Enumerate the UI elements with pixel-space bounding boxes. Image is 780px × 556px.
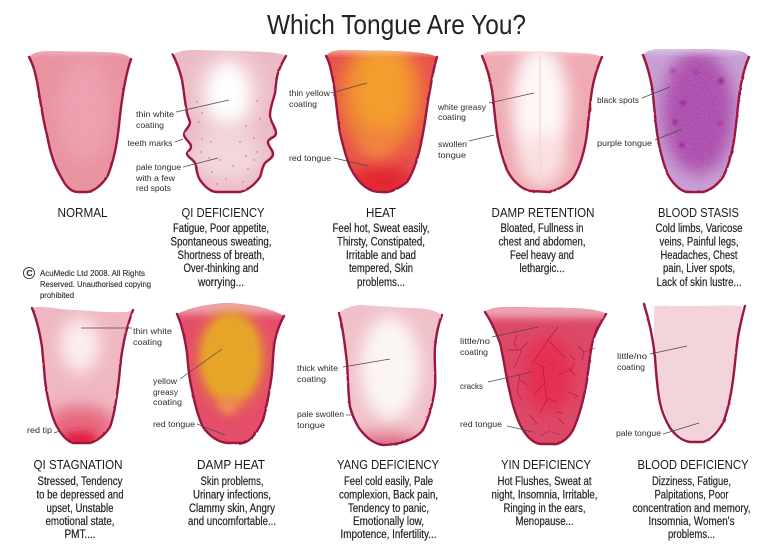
tongue: blood deficiency [642,302,746,444]
annotation: pale swollen tongue: pale swollen [297,409,344,419]
cracks [507,327,595,436]
label: damp retention: lethargic... [520,263,564,275]
label: qi stagnation [34,457,124,541]
label: heat: Feel hot, Sweat easily, [332,223,430,235]
tongue: qi stagnation [30,306,134,444]
tongue: qi deficiency [171,50,288,194]
copyright notice: C [26,268,33,278]
label: damp heat: Skin problems, [200,476,264,488]
annotation: red tongue [460,419,533,432]
label: damp heat: and uncomfortable... [188,516,276,528]
label: damp retention: DAMP RETENTION [492,205,594,220]
label: heat: Irritable and bad [346,250,416,262]
label: yang deficiency [337,457,439,541]
label: damp retention [492,205,594,275]
annotation: white greasy coating [437,93,534,122]
label: qi stagnation: Stressed, Tendency [38,476,123,488]
label: qi deficiency: Fatigue, Poor appetite, [173,223,269,235]
label: blood stasis [656,205,742,289]
annotation: black spots: black spots [597,95,639,105]
label: qi deficiency: Shortness of breath, [178,250,264,262]
label: yang deficiency: Impotence, Infertility... [340,529,436,541]
copyright notice: prohibited [40,290,74,300]
tongue: blood stasis [642,49,750,194]
label: damp retention: chest and abdomen, [498,236,586,248]
annotation: pale tongue with a few red spots: red spots [136,183,171,193]
annotation: little/no coating: little/no [617,351,647,361]
label: qi deficiency: worrying... [197,277,244,289]
annotation: little/no coating [617,346,687,372]
label: qi stagnation: to be depressed and [36,490,124,502]
title: Which Tongue Are You? [267,9,526,40]
label: qi stagnation: upset, Unstable [46,503,114,515]
annotation: pale tongue [616,423,699,438]
tongue: yang deficiency [338,305,444,446]
annotation: white greasy coating: coating [438,112,466,122]
label: heat: problems... [357,277,405,289]
annotation: yellow greasy coating: coating [153,397,182,407]
label: blood stasis: BLOOD STASIS [658,205,739,220]
tongue: heat [324,50,438,194]
label: normal: NORMAL [58,205,108,220]
label: qi deficiency [170,205,272,289]
label: qi stagnation: PMT.... [64,529,96,541]
label: yin deficiency: Menopause... [516,516,574,528]
label: damp heat [188,457,276,528]
annotation: red tongue: red tongue [153,419,195,429]
label: blood stasis: pain, Liver spots, [663,263,735,275]
annotation: white greasy coating: white greasy [437,102,487,112]
copyright notice [23,267,151,300]
label: heat: tempered, Skin [349,263,413,275]
annotation: black spots [597,87,670,105]
label: damp retention: Bloated, Fullness in [500,223,584,235]
label: qi deficiency: Over-thinking and [184,263,258,275]
label: blood deficiency: Dizziness, Fatigue, [652,476,731,488]
annotation: thin white coating: coating [133,337,162,347]
label: blood deficiency: problems... [668,529,715,541]
annotation: thin yellow coating: thin yellow [289,88,331,98]
tongue: yin deficiency [484,307,608,446]
annotation: swollen tongue [438,135,494,160]
annotation: pale tongue with a few red spots [135,158,218,193]
copyright notice: AcuMedic Ltd 2008. All Rights [40,268,145,278]
label: heat [332,205,430,289]
label: yang deficiency: Tendency to panic, [348,503,429,515]
annotation: pale tongue with a few red spots: pale tongue [136,162,181,172]
annotation: thick white coating: thick white [297,363,338,373]
annotation: little/no coating: coating [617,362,645,372]
annotation: thin white coating: thin white [133,326,172,336]
tongue: normal [28,51,132,194]
annotation: cracks: cracks [460,381,483,391]
label: qi stagnation: QI STAGNATION [34,457,122,472]
label: yin deficiency: Ringing in the ears, [504,503,586,515]
label: blood deficiency: concentration and memory, [632,503,750,515]
annotation: thin white coating [81,326,172,347]
annotation: thin white coating: thin white [136,109,174,119]
label: blood stasis: Headaches, Chest [660,250,738,262]
tongue: damp heat [176,303,286,445]
red spots [196,100,261,185]
annotation: thick white coating [297,359,390,384]
label: yin deficiency [492,457,598,528]
label: blood deficiency: BLOOD DEFICIENCY [638,457,749,472]
label: blood stasis: veins, Painful legs, [660,236,738,248]
annotation: little/no coating: little/no [460,336,490,346]
annotation: yellow greasy coating [153,349,222,407]
label: yin deficiency: Hot Flushes, Sweat at [498,476,592,488]
annotation: red tongue: red tongue [460,419,502,429]
label: qi stagnation: emotional state, [46,516,114,528]
black spots [670,68,724,148]
annotation: purple tongue [597,129,682,148]
annotation: thin yellow coating: coating [289,99,317,109]
annotation: cracks [460,372,532,391]
annotation: red tongue [289,153,368,166]
label: blood stasis: Lack of skin lustre... [656,277,742,289]
annotation: pale swollen tongue: tongue [297,420,325,430]
label: blood stasis: Cold limbs, Varicose [656,223,742,235]
annotation: red tongue [153,419,225,435]
label: heat: Thirsty, Constipated, [337,236,425,248]
annotation: little/no coating: coating [460,347,488,357]
annotation: pale swollen tongue [297,409,354,430]
copyright notice: Reserved. Unauthorised copying [40,279,151,289]
annotation: pale tongue with a few red spots: with a few [135,173,176,183]
annotation: thin yellow coating [289,83,367,109]
annotation: yellow greasy coating: greasy [153,387,179,397]
annotation: thin white coating: coating [136,120,164,130]
label: damp heat: DAMP HEAT [197,457,265,472]
label: damp heat: Clammy skin, Angry [189,503,275,515]
annotation: yellow greasy coating: yellow [153,376,178,386]
annotation: swollen tongue: swollen [438,139,467,149]
label: blood deficiency: Palpitations, Poor [654,490,729,502]
label: heat: HEAT [366,205,396,220]
annotation: red tongue: red tongue [289,153,331,163]
label: blood deficiency [632,457,750,541]
label: qi deficiency: Spontaneous sweating, [170,236,272,248]
annotation: red tip: red tip [27,425,52,435]
annotation: thick white coating: coating [297,374,326,384]
label: qi deficiency: QI DEFICIENCY [182,205,265,220]
annotation: teeth marks: teeth marks [128,138,172,148]
label: yang deficiency: Feel cold easily, Pale [344,476,433,488]
tongue: damp retention [480,51,604,194]
label: yin deficiency: night, Insomnia, Irritable, [492,490,598,502]
label: blood deficiency: Insomnia, Women's [648,516,735,528]
annotation: swollen tongue: tongue [438,150,466,160]
annotation: purple tongue: purple tongue [597,138,652,148]
annotation: pale tongue: pale tongue [616,428,661,438]
label: yang deficiency: complexion, Back pain, [339,490,438,502]
label: yang deficiency: Emotionally low, [353,516,424,528]
annotation: little/no coating [460,327,538,357]
label: yang deficiency: YANG DEFICIENCY [337,457,439,472]
label: yin deficiency: YIN DEFICIENCY [501,457,591,472]
label: damp retention: Feel heavy and [510,250,574,262]
annotation: thin white coating [136,100,229,130]
label: damp heat: Urinary infections, [193,490,271,502]
